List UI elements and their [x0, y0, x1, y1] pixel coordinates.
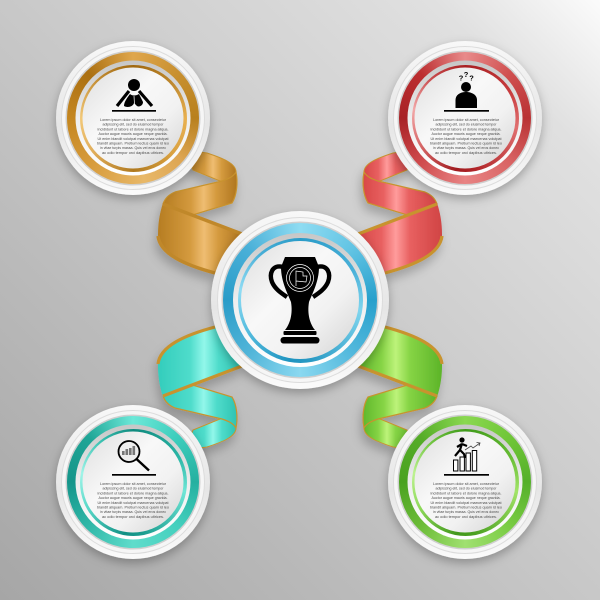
text block: ac odio tempor orci dapibus ultrices. — [102, 150, 164, 155]
icon baseline — [444, 474, 489, 476]
text block: incididunt ut labore et dolore magna aliqua. — [430, 126, 502, 131]
text block: in vitae turpis massa. Quis vel eros donec — [433, 509, 499, 514]
text block: Ut enim blandit volutpat maecenas volutpat — [98, 136, 169, 141]
text block: Ut enim blandit volutpat maecenas volutpat — [98, 500, 169, 505]
icon: magnifier over chart — [118, 441, 149, 470]
text block: ac odio tempor orci dapibus ultrices. — [435, 514, 497, 519]
text block: blandit aliquam. Pretium lectus quam id leo — [430, 140, 502, 146]
text block — [97, 481, 169, 519]
text block: Ut enim blandit volutpat maecenas volutpat — [430, 500, 502, 505]
text block: blandit aliquam. Pretium lectus quam id leo — [97, 140, 169, 146]
text block: Ut enim blandit volutpat maecenas volutpat — [430, 136, 502, 141]
icon: trophy — [271, 257, 329, 344]
text block: in vitae turpis massa. Quis vel eros donec — [433, 145, 499, 150]
icon: runner climbing bar chart — [454, 437, 480, 471]
ribbon: green — [358, 326, 442, 450]
text block: ac odio tempor orci dapibus ultrices. — [102, 514, 164, 519]
panel: teal badge — [56, 405, 210, 559]
panel: central blue badge — [211, 211, 389, 389]
icon: confused person: ? — [469, 74, 474, 82]
text block: blandit aliquam. Pretium lectus quam id leo — [97, 504, 169, 510]
text block: ac odio tempor orci dapibus ultrices. — [435, 150, 497, 155]
text block: Auctor augue mauris augue neque gravida. — [98, 495, 168, 500]
icon baseline — [444, 110, 489, 112]
text block: Auctor augue mauris augue neque gravida. — [98, 131, 168, 136]
text block: incididunt ut labore et dolore magna aliqua. — [430, 490, 502, 495]
text block: adipiscing elit, sed do eiusmod tempor — [436, 486, 497, 491]
text block: adipiscing elit, sed do eiusmod tempor — [102, 122, 164, 127]
ribbon: gold — [158, 150, 242, 274]
icon: seated person — [117, 79, 152, 107]
text block — [430, 481, 502, 519]
icon: confused person — [456, 70, 477, 108]
text block: Auctor augue mauris augue neque gravida. — [432, 131, 500, 136]
ribbon: red — [358, 150, 442, 274]
text block: incididunt ut labore et dolore magna aliqua. — [98, 490, 168, 495]
text block: Lorem ipsum dolor sit amet, consectetur — [100, 481, 167, 486]
icon baseline — [112, 474, 156, 476]
text block — [97, 117, 169, 155]
icon: confused person: ? — [464, 70, 469, 79]
text block: incididunt ut labore et dolore magna aliqua. — [98, 126, 168, 131]
text block: Lorem ipsum dolor sit amet, consectetur — [100, 117, 167, 122]
icon: confused person: ? — [459, 74, 464, 82]
text block: Lorem ipsum dolor sit amet, consectetur — [433, 481, 500, 486]
text block: blandit aliquam. Pretium lectus quam id leo — [430, 504, 502, 510]
text block: in vitae turpis massa. Quis vel eros donec — [100, 509, 166, 514]
text block: adipiscing elit, sed do eiusmod tempor — [102, 486, 164, 491]
panel: gold badge — [56, 41, 210, 195]
text block: adipiscing elit, sed do eiusmod tempor — [436, 122, 497, 127]
text block: Auctor augue mauris augue neque gravida. — [432, 495, 500, 500]
panel: red badge — [388, 41, 542, 195]
ribbon: teal — [158, 326, 242, 450]
text block — [430, 117, 502, 155]
text block: in vitae turpis massa. Quis vel eros donec — [100, 145, 166, 150]
panel: green badge — [388, 405, 542, 559]
text block: Lorem ipsum dolor sit amet, consectetur — [433, 117, 500, 122]
icon baseline — [112, 110, 156, 112]
